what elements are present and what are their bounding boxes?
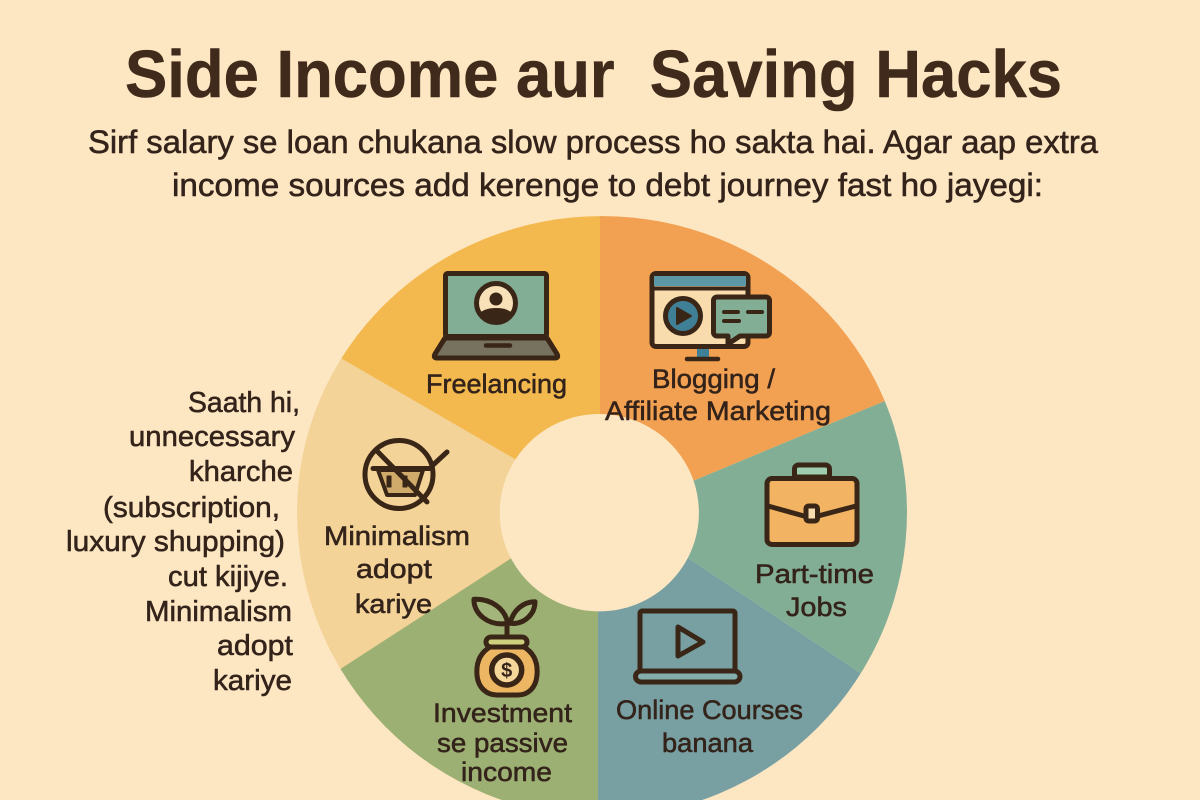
label: part-time jobs: Part-time	[755, 559, 874, 589]
label: freelancing: Freelancing	[426, 369, 567, 399]
icon: no shopping basket	[365, 440, 447, 508]
label: investment	[433, 698, 573, 787]
icon: blog window and chat	[652, 274, 770, 359]
side note text: Minimalism	[145, 596, 292, 628]
segment: freelancing	[342, 216, 601, 460]
side note text: unnecessary	[129, 421, 295, 453]
center hole	[500, 414, 699, 611]
side note text: kharche	[189, 456, 293, 488]
icon: video laptop	[636, 611, 740, 682]
icon: briefcase	[767, 465, 857, 544]
side note text: Saath hi,	[188, 387, 300, 419]
side note text: luxury shupping)	[66, 526, 285, 558]
label: investment: se passive	[437, 728, 568, 758]
segment: investment	[340, 558, 598, 800]
side note text: (subscription,	[103, 492, 280, 524]
icon: money bag with plant	[474, 599, 537, 695]
label: investment: Investment	[433, 698, 573, 728]
subtitle: income sources add kerenge to debt journey fast ho jayegi:	[172, 167, 1043, 203]
label: online courses: Online Courses	[616, 695, 803, 725]
dollar sign: $	[501, 660, 512, 682]
side note text: adopt	[217, 630, 293, 662]
subtitle: Sirf salary se loan chukana slow process ho sakta hai. Agar aap extra	[88, 124, 1098, 160]
label: part-time jobs: Jobs	[786, 592, 847, 622]
label: minimalism	[324, 521, 470, 619]
segment: minimalism	[297, 216, 620, 800]
donut wheel	[297, 216, 907, 800]
label: investment: income	[461, 757, 552, 787]
label: online courses	[616, 695, 803, 758]
subtitle	[88, 124, 1098, 203]
title: Side Income aur Saving Hacks	[125, 37, 1062, 112]
label: minimalism: Minimalism	[324, 521, 470, 551]
label: minimalism: adopt	[356, 554, 433, 584]
side note text	[66, 387, 300, 697]
segment: part-time jobs	[688, 401, 907, 674]
side note text: cut kijiye.	[168, 561, 288, 593]
label: blogging: Affiliate Marketing	[605, 396, 831, 426]
label: minimalism: kariye	[355, 589, 432, 619]
label: blogging: Blogging /	[652, 364, 776, 394]
icon: laptop with profile	[434, 274, 558, 358]
label: online courses: banana	[662, 728, 754, 758]
label: blogging	[605, 364, 831, 426]
side note text: kariye	[213, 665, 292, 697]
label: part-time jobs	[755, 559, 874, 622]
segment: blogging	[600, 216, 885, 480]
segment: online courses	[598, 558, 861, 800]
